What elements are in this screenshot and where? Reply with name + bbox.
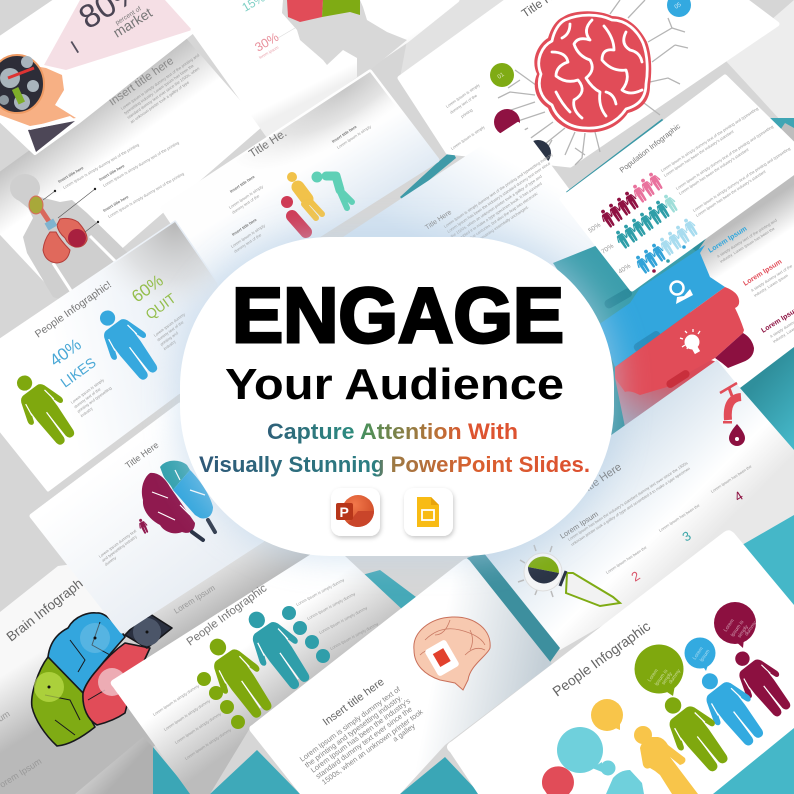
illustration: teal person <box>234 600 320 697</box>
illustration: split brain <box>142 461 215 540</box>
heading: title here: Title He. <box>247 127 289 161</box>
illustration: red brain <box>534 11 651 132</box>
text block: marker captions: Lorem Ipsum is simply <box>450 124 486 151</box>
text block: step captions <box>605 463 753 575</box>
heading: people infographic: People Infographic <box>185 582 270 648</box>
icon: brain bulb and pencil <box>518 545 620 606</box>
text block: quit caption: printing and <box>159 330 179 347</box>
icon: blue person <box>86 299 167 388</box>
text block: green captions <box>152 683 232 761</box>
text block: marker captions: dummy text of the <box>449 92 479 115</box>
text block: likes caption: industry <box>79 406 94 418</box>
text block: long paragraph <box>443 152 570 254</box>
panel: insert title brain slide <box>249 559 552 794</box>
illustration: coughing people <box>281 172 352 232</box>
bubble captions: Ipsum is <box>654 668 670 687</box>
text block: blue item: Lorem Ipsum <box>707 225 748 255</box>
stat: 80 percent of market <box>68 0 155 58</box>
text block: labels <box>228 124 372 254</box>
icon: light bulb <box>680 329 700 354</box>
text block: long paragraph: Lorem Ipsum has been the industry's standard dummy text ever since <box>446 160 552 234</box>
text block: blue item: A simply dummy text of the printing and <box>716 218 778 259</box>
icons: green circles <box>197 672 245 729</box>
text block: labels: Lorem Ipsum is simply <box>228 184 264 210</box>
stat: 60 percent quit: QUIT <box>142 290 179 322</box>
text block: caption <box>98 528 144 567</box>
labels: percentages: 40% <box>617 263 632 276</box>
text block: paragraph: Lorem Ipsum has been the industry's <box>309 696 412 775</box>
labels: percentages <box>587 222 632 276</box>
text block: caption: dummy <box>104 555 117 567</box>
stat: 80 percent of market: percent of <box>114 5 143 27</box>
panel: green people infographic slide <box>111 542 405 794</box>
text block: step captions: Lorem Ipsum has been the <box>605 544 648 575</box>
stat: 60 percent quit <box>128 271 179 322</box>
text block: green captions: Lorem Ipsum is simply dummy <box>163 698 211 732</box>
title: ENGAGE: ENGAGE <box>232 271 564 359</box>
text block: population text: Lorem Ipsum has been the industry's standard <box>678 147 749 196</box>
text block: long paragraph: typesetting, remaining essentially unchanged. <box>460 204 529 254</box>
icon: PowerPoint: P <box>340 504 349 520</box>
text block: step captions: Lorem Ipsum has been the <box>658 502 701 533</box>
bubble captions: simply <box>737 624 750 639</box>
text block: insert title paragraph: typesetting industry. Lorem Ipsum has been the <box>123 63 195 115</box>
bubble: red <box>542 766 574 794</box>
text block: marker captions: printing <box>460 107 473 119</box>
panel: brain infographic slide <box>0 535 375 794</box>
text block: paragraph: 1500s, when an unknown printer took <box>320 707 425 787</box>
illustration: root branches <box>498 0 688 165</box>
bubble captions: dummy <box>668 668 682 685</box>
stat: 80 percent of market: market <box>110 4 155 41</box>
text block: labels: dummy text of the <box>231 193 261 215</box>
text block: paragraph: a galley <box>391 721 417 744</box>
text block: lung labels <box>57 140 185 219</box>
step numbers <box>628 488 746 585</box>
icon: small figure <box>136 517 150 535</box>
illustration: head with gears <box>0 55 76 152</box>
bubble captions: simply <box>661 671 674 686</box>
panel: head silhouette slide <box>193 0 457 135</box>
heading: insert title here: Insert title here <box>107 55 176 108</box>
step numbers: 3 <box>679 528 694 545</box>
text block: red item: Lorem Ipsum <box>742 258 783 288</box>
text block: paragraph: standard dummy text ever since the <box>314 705 414 781</box>
icon: gear and person <box>670 282 693 304</box>
stat: 40 percent likes: 40% <box>46 335 85 370</box>
text block: lorem ipsum intro: Lorem Ipsum has been the industry's standard dummy text ever since the 1500s <box>567 460 689 542</box>
figure: red <box>281 196 306 232</box>
text block: population text <box>660 106 791 218</box>
bubble captions: Ipsum <box>699 649 711 663</box>
text block: green captions: Lorem Ipsum is simply dummy <box>174 711 222 745</box>
legend <box>652 245 686 273</box>
text block: quit caption: Lorem Ipsum dummy <box>153 312 186 338</box>
heading: title here: Title Here <box>578 461 624 497</box>
bubble captions: Lorem <box>692 646 705 661</box>
markers: numbered circles: 01 <box>497 72 506 81</box>
glow behind central badge <box>176 233 618 560</box>
text block: likes caption: Lorem Ipsum is simply <box>70 377 105 405</box>
text block: long paragraph: the 1500s, when an unknown printer took a galley of type and <box>449 174 543 239</box>
light beam <box>44 0 192 70</box>
text block: paragraph: Lorem Ipsum is simply dummy text of <box>298 684 403 764</box>
text block: population text: Lorem Ipsum is simply dummy text of the printing and typesetting <box>660 106 759 173</box>
text block: long paragraph: not only five centuries, but also the leap into electronic <box>456 191 539 249</box>
text block: teal captions: Lorem Ipsum is simply dummy <box>318 605 368 635</box>
text block: population text: Lorem Ipsum has been the industry's standard <box>663 129 734 178</box>
text block: insert title paragraph: an unknown printer took a galley of type <box>129 79 191 124</box>
text block: likes caption: dummy text of the <box>73 386 102 409</box>
stat: 80 percent of market: I <box>68 38 83 58</box>
blue layer <box>598 245 725 367</box>
stat: 60 percent quit: 60% <box>128 271 167 306</box>
text block: lung labels: Insert title here <box>98 163 126 182</box>
text block: quit caption <box>153 312 196 351</box>
figure: teal bent <box>312 172 352 208</box>
panel: lorem ipsum slide with layered head <box>553 123 794 427</box>
stat: 30 percent: 30% <box>252 30 281 55</box>
text block: teal captions: Lorem Ipsum is simply dummy <box>306 591 356 621</box>
bubble and person: maroon <box>714 602 794 724</box>
illustration: head silhouette <box>282 0 407 77</box>
panel: title brain slide <box>32 405 262 631</box>
bubble and person: green <box>634 644 738 780</box>
labels: lorem ipsum: Lorem Ipsum <box>172 583 217 616</box>
icon: Google Slides <box>404 488 453 536</box>
illustration: body silhouette with lungs <box>10 174 128 305</box>
tagline line two: Visually Stunning PowerPoint Slides. <box>199 452 590 477</box>
stat: 30 percent <box>252 28 295 60</box>
figure: yellow <box>287 172 322 218</box>
subtitle: your audience: Your Audience <box>225 360 564 409</box>
heading: brain infographic: Brain Infographic <box>4 570 93 644</box>
text block: population text: Lorem Ipsum is simply dummy text of the printing and typesetting <box>692 146 791 213</box>
panel: red brain slide <box>400 0 777 166</box>
stat: 30 percent: lorem ipsum <box>258 44 280 60</box>
text block: labels: dummy text of the <box>233 232 263 254</box>
text block: long paragraph: Lorem Ipsum is simply dummy text of the printing and typesetting industry <box>443 152 554 229</box>
text block: labels: Lorem Ipsum is simply <box>230 223 266 249</box>
text block: marker captions <box>445 82 486 151</box>
icon: PowerPoint <box>331 488 380 536</box>
heading: population infographic: Population Infographic <box>618 121 682 175</box>
text block: quit caption: dummy text of the <box>156 319 185 342</box>
text block: long paragraph: scrambled it to make a type specimen book. It has survived <box>453 181 543 244</box>
text block: labels: Insert title here <box>331 124 358 144</box>
text block: step captions: Lorem Ipsum has been the <box>710 463 753 494</box>
panel: head with gears slide <box>0 0 240 153</box>
text block: likes caption <box>70 376 116 418</box>
text block: red item <box>742 258 794 298</box>
text block: green captions: Lorem Ipsum is simply dummy <box>152 683 200 717</box>
text block: red item: industry. Lorem Ipsum <box>753 272 789 298</box>
tagline line one: Capture Attention With <box>267 419 518 444</box>
bubble and person: yellow <box>591 699 698 794</box>
panel: lungs slide <box>0 40 260 305</box>
text block: lung labels: Insert title here <box>102 194 130 213</box>
panel: population slide <box>562 77 794 289</box>
text block: population text: Lorem Ipsum is simply dummy text of the printing and typesetting <box>675 124 774 191</box>
text block: lorem ipsum intro: Lorem Ipsum <box>558 509 600 541</box>
text block: labels: Insert title here <box>231 217 258 237</box>
text block: caption: and typesetting industry <box>101 534 138 563</box>
stat: 40 percent likes <box>46 335 99 390</box>
chart: people rows <box>598 170 700 275</box>
light background patches <box>400 0 794 135</box>
text block: insert title paragraph: Lorem Ipsum is simply dummy text of the printing and <box>120 52 200 111</box>
lilac fade below red layer <box>615 350 717 427</box>
text block: lung labels: Lorem Ipsum is simply dummy text of the printing <box>62 142 140 190</box>
bubble captions: dummy <box>744 620 758 637</box>
text block: green captions: Lorem Ipsum is simply dummy <box>184 727 232 761</box>
bubble captions: Lorem <box>723 618 736 633</box>
heading: insert title here: Insert title here <box>321 676 387 728</box>
text block: labels: Insert title here <box>229 174 256 194</box>
teal background shapes <box>153 118 794 794</box>
heading: people infographic: People Infographic! <box>33 279 114 340</box>
heading: title here: Title Here <box>123 440 160 471</box>
illustration: colored brain <box>32 612 172 746</box>
icon: green person <box>3 364 84 453</box>
text block: lung labels: Lorem Ipsum is simply dummy text of the printing <box>102 140 180 188</box>
step numbers: 2 <box>628 568 643 585</box>
text block: population text: Lorem Ipsum has been the industry's standard <box>695 169 766 218</box>
illustration: anatomical brain with switch <box>414 617 490 690</box>
labels: lorem ipsum <box>0 583 217 790</box>
illustration: green person <box>195 627 282 726</box>
text block: lung labels: Insert title here <box>57 165 85 184</box>
maroon layer <box>715 333 754 368</box>
labels: percentages: 50% <box>587 222 602 235</box>
panel: people coughing slide <box>163 72 437 285</box>
panel: people 40/60 slide <box>0 222 235 490</box>
text block: likes caption: printing and typesetting <box>76 385 113 414</box>
text block: marker captions: Lorem Ipsum is simply <box>445 82 481 109</box>
panel: long text slide <box>345 124 650 420</box>
bubble and person: blue <box>684 638 774 754</box>
icon: faucet and drop <box>720 383 745 446</box>
text block: insert title paragraph: standard dummy text ever since the 1500s, when <box>126 66 200 120</box>
heading: title here: Title Here <box>424 209 453 232</box>
text block: labels: Lorem Ipsum is simply <box>336 124 372 150</box>
text block: paragraph: the printing and typesetting industry. <box>303 693 404 770</box>
panel: faucet steps slide <box>467 360 794 665</box>
red layer <box>615 287 744 395</box>
text block: lorem ipsum intro: unknown printer took a galley of type and scrambled it to make a type specimen <box>570 466 691 547</box>
text block: red item: A simply dummy text of the <box>750 263 794 293</box>
group: people with speech bubbles <box>542 602 794 794</box>
text block: teal captions <box>295 577 379 651</box>
markers: numbered circles: 05 <box>674 2 683 11</box>
stat: 40 percent likes: LIKES <box>57 354 99 390</box>
bubble captions: Ipsum is <box>730 619 746 638</box>
bubble captions: Lorem <box>647 668 660 683</box>
step numbers: 4 <box>731 488 746 505</box>
panel: bottom people infographic slide <box>447 530 794 794</box>
text block: teal captions: Lorem Ipsum is simply dummy <box>329 621 379 651</box>
icons: teal circles <box>282 606 330 663</box>
labels: percentages: 70% <box>600 243 615 256</box>
heading: people infographic: People Infographic <box>549 618 653 699</box>
text block: paragraph <box>298 684 425 787</box>
text block: teal captions: Lorem Ipsum is simply dummy <box>295 577 345 607</box>
bubble captions <box>647 618 758 687</box>
text block: quit caption: industry <box>162 339 177 351</box>
markers: numbered circles <box>490 0 691 166</box>
text block: caption: Lorem Ipsum dummy text <box>98 528 138 559</box>
text block: lung labels: Lorem Ipsum is simply dummy text of the printing <box>107 171 185 219</box>
text block: blue item: industry. Lorem Ipsum has been the <box>719 226 776 264</box>
bubble and person: light teal <box>557 727 644 794</box>
panel: central white badge <box>180 237 614 556</box>
